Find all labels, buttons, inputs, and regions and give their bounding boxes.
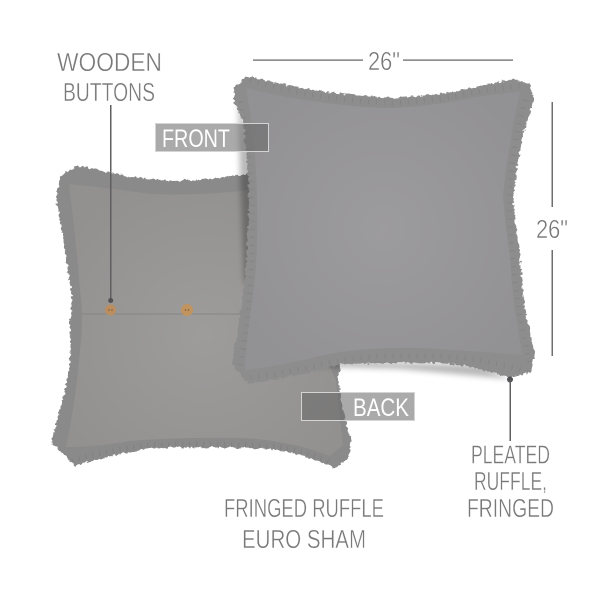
label: product name: EURO SHAM xyxy=(242,524,366,554)
label: pleated ruffle, fringed: PLEATED xyxy=(471,440,550,470)
dimension: width 26 inches: 26" xyxy=(368,46,400,76)
leader line: wooden buttons xyxy=(108,105,113,303)
front pillow drop shadow xyxy=(238,95,510,379)
front pillow body panel xyxy=(245,88,522,370)
dimension: height 26 inches: 26" xyxy=(536,214,568,244)
tag: back: BACK xyxy=(353,394,409,422)
label: product name xyxy=(224,493,384,554)
tag: back xyxy=(302,392,414,422)
label: wooden buttons: BUTTONS xyxy=(63,77,155,107)
label: wooden buttons: WOODEN xyxy=(57,47,162,77)
tag: front: FRONT xyxy=(162,125,230,153)
back pillow placket seam xyxy=(82,313,240,315)
wooden button left xyxy=(105,304,116,316)
wooden button right xyxy=(181,304,193,316)
label: wooden buttons xyxy=(57,47,162,107)
label: pleated ruffle, fringed xyxy=(467,440,554,523)
back pillow xyxy=(51,165,351,468)
label: product name: FRINGED RUFFLE xyxy=(224,493,384,523)
back pillow fringed ruffle xyxy=(51,165,351,468)
front pillow xyxy=(232,76,535,383)
leader line: pleated ruffle xyxy=(507,376,513,441)
front pillow ruffle pleats xyxy=(240,80,530,378)
label: pleated ruffle, fringed: FRINGED xyxy=(467,493,554,523)
back pillow body panel xyxy=(66,184,343,456)
label: pleated ruffle, fringed: RUFFLE, xyxy=(474,466,547,496)
front pillow fringed ruffle xyxy=(232,76,535,383)
back pillow ruffle pleats xyxy=(72,444,333,464)
